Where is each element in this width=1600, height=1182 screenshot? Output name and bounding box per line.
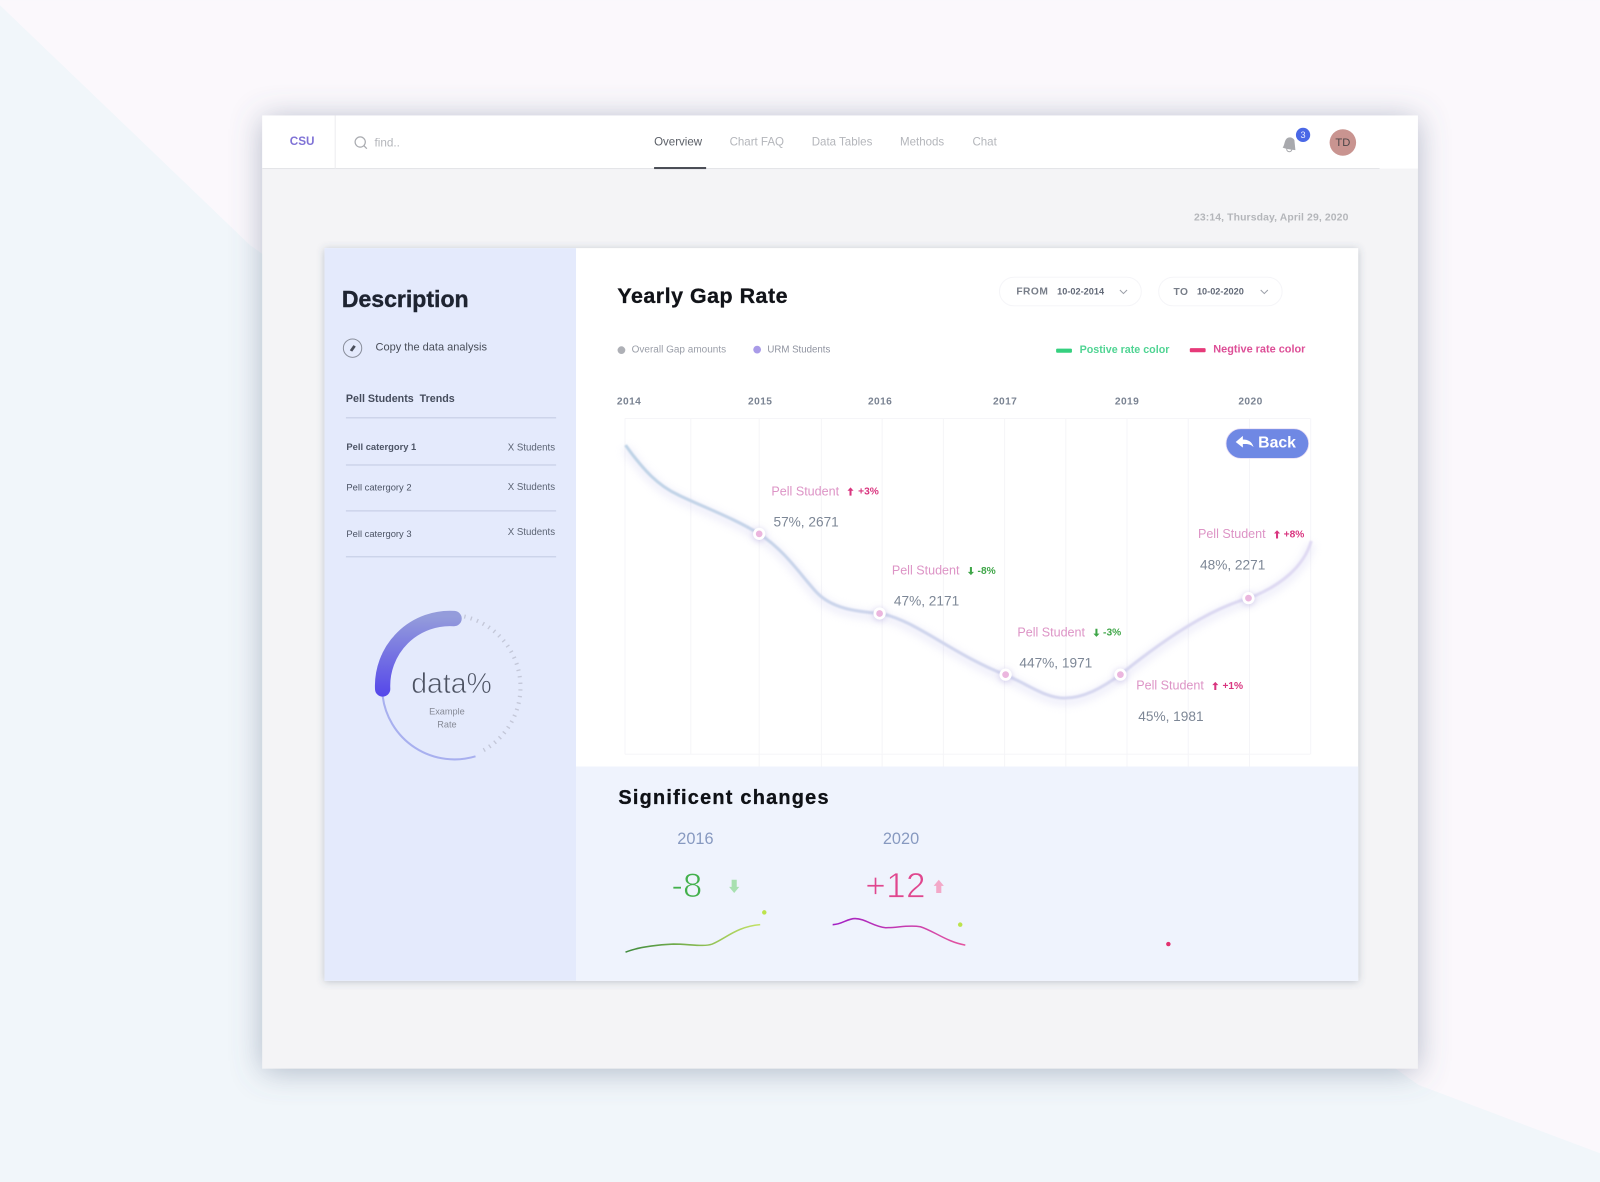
date filter: to: TO: [1173, 287, 1188, 298]
callout: 2017: [1017, 625, 1121, 670]
legend: series: Overall Gap amounts: [632, 345, 726, 356]
line chart curve: [626, 445, 1311, 701]
list: pell students trends: X Students: [508, 527, 555, 538]
copy link: [343, 339, 487, 357]
stat: 2020: [833, 830, 965, 945]
notification bell: [1283, 128, 1310, 152]
heading: yearly gap rate: Yearly Gap Rate: [617, 284, 788, 308]
donut gauge: Example: [429, 706, 465, 716]
donut gauge: [383, 617, 520, 759]
callout: 2020: [1198, 527, 1304, 572]
legend: rate colours: Postive rate color: [1080, 344, 1169, 356]
date filter: from: 10-02-2014: [1057, 287, 1105, 297]
data markers: [753, 528, 1255, 681]
dashboard window: [262, 115, 1418, 1069]
nav tabs: Data Tables: [812, 137, 873, 149]
stray data point: [1166, 942, 1171, 946]
donut gauge: data%: [411, 668, 492, 700]
callout: 2019: +1%: [1222, 681, 1243, 692]
panel: yearly gap rate chart: [617, 277, 1311, 767]
callout: 2016: Pell Student: [892, 564, 960, 578]
list: pell students trends: X Students: [508, 482, 555, 493]
callout: 2015: +3%: [858, 487, 879, 498]
list: pell students trends: Pell catergory 3: [346, 529, 412, 539]
callout: 2020: +8%: [1284, 529, 1304, 540]
callout: 2015: 57%, 2671: [773, 515, 839, 530]
callout: 2019: [1136, 678, 1243, 724]
stat: 2016: 2016: [677, 830, 714, 848]
search box: find..: [374, 137, 400, 150]
copy link: Copy the data analysis: [376, 342, 487, 354]
year axis: 2017: [993, 397, 1017, 408]
callout: 2019: Pell Student: [1136, 678, 1204, 692]
callout: 2015: [771, 485, 879, 530]
top navigation bar: [262, 115, 1418, 169]
year axis: [617, 397, 1263, 408]
date filter: to: [1159, 277, 1282, 306]
callout: 2019: 45%, 1981: [1138, 709, 1204, 724]
main card: [324, 248, 1358, 981]
year axis: 2019: [1115, 397, 1139, 408]
panel: significant changes: [576, 767, 1358, 981]
nav tabs: Methods: [900, 137, 944, 149]
callout: 2020: 48%, 2271: [1200, 557, 1265, 572]
stat: 2020: +12: [865, 866, 926, 905]
list: pell students trends: [346, 393, 556, 557]
back button: Back: [1258, 435, 1296, 452]
list: pell students trends: Pell catergory 1: [346, 442, 416, 452]
callout: 2016: -8%: [978, 566, 996, 577]
back button: [1226, 429, 1309, 458]
heading: description: Description: [342, 286, 469, 312]
timestamp: 23:14, Thursday, April 29, 2020: [1194, 213, 1349, 224]
callout: 2017: -3%: [1103, 627, 1121, 638]
list: pell students trends: Pell catergory 2: [346, 482, 412, 492]
year axis: 2014: [617, 397, 641, 408]
stat: 2020: 2020: [883, 830, 919, 848]
year axis: 2020: [1238, 397, 1263, 408]
callout: 2016: [892, 564, 996, 609]
user avatar: TD: [1335, 137, 1350, 149]
callout: 2015: Pell Student: [771, 485, 840, 499]
list: pell students trends: Pell Students Trends: [346, 393, 455, 405]
nav tabs: [654, 137, 998, 169]
stat: 2016: -8: [671, 867, 702, 905]
date filter: to: 10-02-2020: [1197, 287, 1244, 297]
year axis: 2016: [868, 397, 892, 408]
callout: 2017: 447%, 1971: [1019, 655, 1092, 670]
legend: series: [618, 345, 830, 356]
nav tabs: Overview: [654, 137, 703, 149]
legend: rate colours: [1056, 344, 1306, 356]
nav tabs: Chat: [972, 137, 998, 149]
notification bell: 3: [1301, 130, 1306, 140]
date filter: from: FROM: [1016, 287, 1048, 298]
stat: 2016: [626, 830, 767, 952]
donut gauge: Rate: [437, 720, 457, 730]
nav tabs: Chart FAQ: [730, 137, 784, 149]
year axis: 2015: [748, 397, 772, 408]
legend: series: URM Students: [767, 345, 830, 356]
legend: rate colours: Negtive rate color: [1213, 344, 1306, 356]
logo: CSU: [290, 135, 315, 148]
search box: [355, 137, 400, 150]
callout: 2020: Pell Student: [1198, 527, 1266, 541]
date filter: from: [999, 277, 1141, 306]
callout: 2016: 47%, 2171: [894, 594, 959, 609]
heading: significent changes: Significent changes: [618, 787, 830, 809]
user avatar: [1330, 129, 1356, 156]
panel: description: [324, 248, 576, 981]
list: pell students trends: X Students: [508, 443, 555, 454]
callout: 2017: Pell Student: [1017, 625, 1086, 639]
